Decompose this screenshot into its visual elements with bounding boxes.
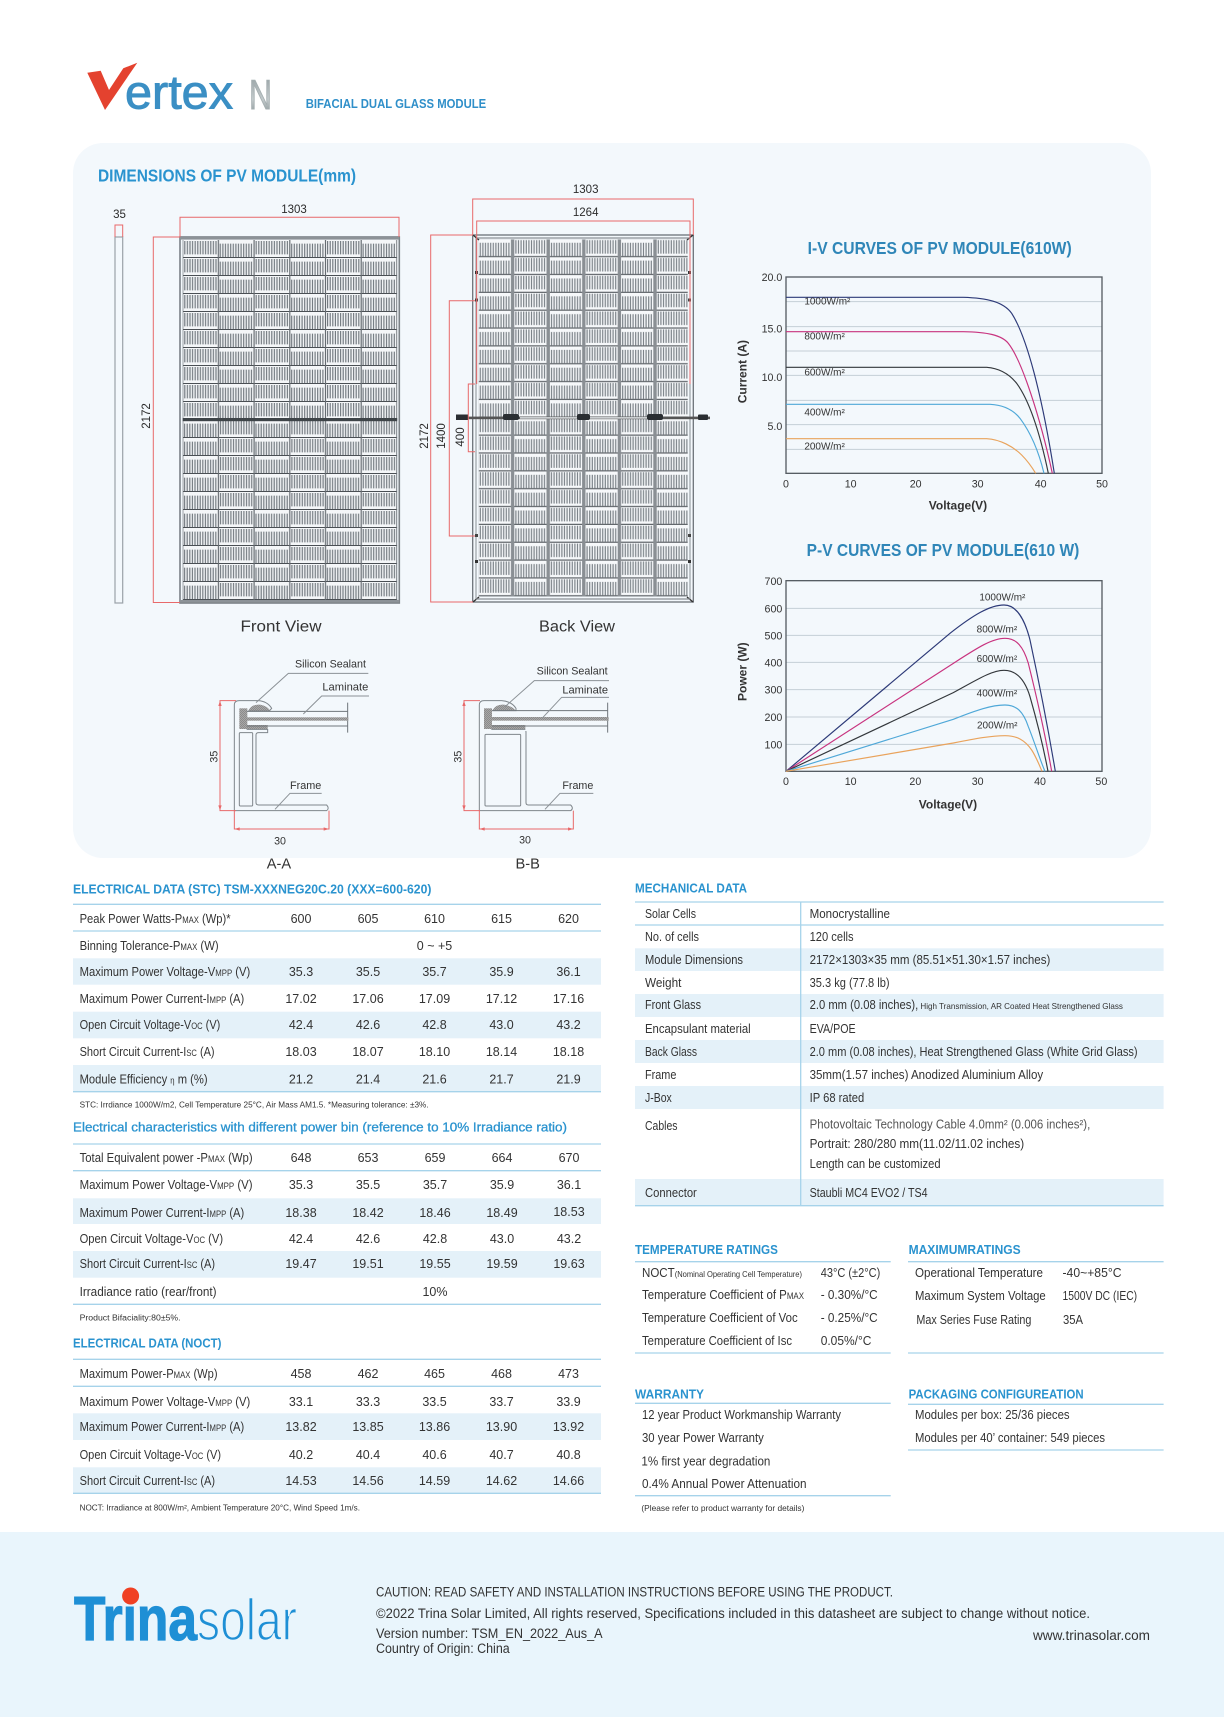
row: Isc: 18.07	[352, 1045, 384, 1059]
chart: I-V curves: 0	[783, 478, 789, 490]
footnote: STC: STC: Irrdiance 1000W/m2, Cell Temperature 25°C, Air Mass AM1.5. *Measuring tolerance: ±3%.	[80, 1100, 429, 1109]
row: Impp: 13.92	[553, 1420, 584, 1434]
text: caution and copyright: ©2022 Trina Solar Limited, All rights reserved, Specifications included in this datasheet are subject to change without notice.	[376, 1606, 1090, 1621]
row: coefficient of Voc: Temperature Coefficient of Voc	[642, 1310, 798, 1325]
row: Isc: 19.59	[486, 1257, 518, 1271]
row: solar cells	[645, 906, 890, 921]
row: encapsulant: EVA/POE	[810, 1021, 856, 1036]
row: system voltage: Maximum System Voltage	[915, 1288, 1046, 1303]
chart: P-V curves: 10	[845, 776, 857, 788]
row: binning tolerance: 0 ~ +5	[417, 939, 452, 953]
row: Impp: 17.09	[419, 992, 450, 1006]
row: total equivalent power: 670	[559, 1151, 579, 1165]
chart: I-V curves: 400W/m²	[804, 407, 846, 418]
dimension: back heights	[419, 235, 475, 602]
row: Isc: 19.51	[352, 1257, 384, 1271]
dimension: back widths	[473, 184, 693, 384]
chart: I-V curves: 10.0	[762, 372, 782, 384]
chart: I-V curves: 15.0	[762, 324, 782, 336]
row: Isc: 14.62	[486, 1474, 517, 1488]
row: Vmpp: 35.5	[356, 965, 380, 979]
row: Isc: 19.55	[419, 1257, 451, 1271]
drawing: cross section B-B: 35	[452, 751, 464, 763]
dimension: front width: 1303	[281, 204, 307, 216]
note: warranty details: (Please refer to product warranty for details)	[641, 1503, 805, 1513]
row: Isc: 18.03	[285, 1045, 317, 1059]
row: peak power: Peak Power Watts-PMAX (Wp)*	[80, 911, 231, 926]
drawing: cross section A-A: Silicon Sealant	[295, 659, 366, 671]
panel: dimensions and curves background	[73, 143, 1151, 858]
row: weight: Weight	[645, 975, 682, 990]
drawing: cross section A-A: 30	[274, 835, 286, 847]
row: max power: 465	[424, 1367, 445, 1381]
row: total equivalent power: 648	[291, 1151, 311, 1165]
row: efficiency: 21.9	[556, 1072, 581, 1086]
row: Isc: Short Circuit Current-ISC (A)	[80, 1044, 215, 1059]
row: max power: 473	[558, 1367, 579, 1381]
row: Impp: Maximum Power Current-IMPP (A)	[80, 1419, 244, 1434]
row: peak power: 620	[558, 912, 579, 926]
label: front view: Front View	[240, 619, 322, 636]
chart: I-V curves: 20	[910, 478, 922, 490]
row: Voc: 42.4	[289, 1232, 313, 1246]
row: Impp: 13.82	[285, 1420, 317, 1434]
row: connector: Connector	[645, 1185, 697, 1200]
chart: P-V curves: 300	[765, 685, 782, 697]
dimension: back heights: 2172	[419, 423, 431, 449]
row: max power: 458	[291, 1367, 311, 1381]
row: weight: 35.3 kg (77.8 lb)	[810, 975, 890, 990]
row: operational temperature	[915, 1265, 1122, 1280]
row: irradiance ratio: Irradiance ratio (rear/front)	[80, 1284, 217, 1299]
row: back glass: 2.0 mm (0.08 inches), Heat Strengthened Glass (White Grid Glass)	[810, 1044, 1138, 1059]
row: total equivalent power	[80, 1150, 579, 1165]
row: Isc: Short Circuit Current-ISC (A)	[80, 1473, 215, 1488]
row: number of cells: No. of cells	[645, 929, 699, 944]
row: Isc	[80, 1473, 584, 1488]
row: coefficient of Pmax: Temperature Coefficient of PMAX	[642, 1287, 804, 1302]
drawing: cross section A-A: 35	[208, 751, 220, 763]
logo: Vertex N: ertex	[125, 65, 233, 118]
chart: P-V curves: 30	[972, 776, 984, 788]
row: Impp: Maximum Power Current-IMPP (A)	[80, 1205, 244, 1220]
row: Vmpp: 35.9	[489, 965, 514, 979]
row: Isc: 19.47	[285, 1257, 317, 1271]
row: Voc: Open Circuit Voltage-VOC (V)	[80, 1447, 221, 1462]
row: peak power: 615	[491, 912, 512, 926]
chart: I-V curves: 20.0	[762, 272, 782, 284]
heading: maximum ratings: MAXIMUMRATINGS	[909, 1242, 1021, 1257]
chart: P-V curves: 0	[783, 776, 789, 788]
row: irradiance ratio	[80, 1284, 448, 1299]
dimension: back heights: 1400	[436, 423, 448, 449]
row: encapsulant: Encapsulant material	[645, 1021, 751, 1036]
drawing: cross section B-B	[452, 666, 609, 872]
row: Isc: 18.18	[553, 1045, 584, 1059]
heading: dimensions: DIMENSIONS OF PV MODULE(mm)	[98, 166, 356, 186]
row: Vmpp: 33.9	[556, 1395, 581, 1409]
row: peak power: 610	[424, 912, 445, 926]
row: system voltage: 1500V DC (IEC)	[1062, 1288, 1137, 1303]
row: number of cells	[645, 929, 854, 944]
dimension: front height	[141, 237, 180, 602]
row: Vmpp: Maximum Power Voltage-VMPP (V)	[80, 964, 250, 979]
chart: P-V curves: 50	[1095, 776, 1107, 788]
chart: I-V curves: 40	[1035, 478, 1047, 490]
row: front glass	[645, 997, 1123, 1012]
heading: temperature ratings: TEMPERATURE RATINGS	[635, 1242, 778, 1257]
row: Voc: 43.0	[489, 1018, 514, 1032]
chart: P-V curves: 600	[765, 603, 782, 615]
row: irradiance ratio: 10%	[422, 1285, 448, 1299]
row: Isc: 18.10	[419, 1045, 450, 1059]
row: peak power	[80, 911, 579, 926]
row: max power: Maximum Power-PMAX (Wp)	[80, 1366, 218, 1381]
product subtitle: BIFACIAL DUAL GLASS MODULE	[306, 97, 486, 111]
row: binning tolerance	[80, 938, 452, 953]
row: peak power: 600	[291, 912, 311, 926]
logo: Trina Solar: Trina	[74, 1585, 197, 1654]
row: efficiency: Module Efficiency η m (%)	[80, 1072, 208, 1086]
chart: I-V curves: 200W/m²	[804, 441, 846, 452]
row: Voc: 40.8	[556, 1448, 581, 1462]
row: Voc	[80, 1447, 581, 1462]
row: Voc: 42.6	[356, 1018, 380, 1032]
table: power bin characteristics	[73, 1144, 601, 1304]
chart: I-V curves: 1000W/m²	[804, 297, 851, 308]
drawing: cross section B-B: 30	[519, 835, 531, 847]
row: Voc: 43.0	[490, 1232, 514, 1246]
row: Voc: 43.2	[556, 1018, 581, 1032]
text: caution and copyright: Country of Origin: China	[376, 1641, 510, 1656]
heading: power bin characteristics: Electrical characteristics with different power bin (reference to 10% Irradiance ratio)	[73, 1120, 567, 1135]
drawing: cross section A-A: Laminate	[322, 682, 368, 694]
row: Impp: 18.53	[553, 1205, 585, 1219]
row: connector	[645, 1185, 928, 1200]
row: solar cells: Monocrystalline	[810, 906, 890, 921]
row: Voc: 42.4	[289, 1018, 313, 1032]
row: total equivalent power: 664	[492, 1151, 512, 1165]
row: coefficient of Isc: 0.05%/°C	[821, 1333, 871, 1348]
row: Isc: 14.66	[553, 1474, 584, 1488]
list: warranty: 1% first year degradation	[641, 1454, 770, 1468]
table: electrical data NOCT	[73, 1359, 601, 1493]
row: Vmpp: 35.7	[422, 965, 447, 979]
list: warranty: 0.4% Annual Power Attenuation	[642, 1476, 807, 1491]
chart: P-V curves: P-V CURVES OF PV MODULE(610 W)	[807, 540, 1079, 560]
chart: P-V curves: Power (W)	[736, 642, 750, 701]
row: Voc: 43.2	[557, 1232, 581, 1246]
chart: I-V curves: 10	[845, 478, 857, 490]
row: j-box	[645, 1090, 864, 1105]
row: front glass: High Transmission, AR Coated Heat Strengthened Glass	[920, 1001, 1123, 1011]
row: Voc: 42.6	[356, 1232, 380, 1246]
dimension: back heights: 400	[455, 427, 467, 447]
chart: P-V curves: 400W/m²	[977, 689, 1018, 700]
row: Impp: 13.90	[486, 1420, 517, 1434]
row: cables: Cables	[645, 1118, 678, 1133]
row: Vmpp: 33.3	[356, 1395, 380, 1409]
row: cables: Portrait: 280/280 mm(11.02/11.02 inches)	[810, 1136, 1024, 1151]
row: weight	[645, 975, 890, 990]
heading: electrical data STC: ELECTRICAL DATA (STC) TSM-XXXNEG20C.20 (XXX=600-620)	[73, 881, 431, 896]
row: NOCT: 43°C (±2°C)	[821, 1265, 880, 1280]
row: front glass: 2.0 mm (0.08 inches),	[810, 997, 918, 1012]
chart: I-V curves: Current (A)	[736, 340, 750, 403]
footnote: bifaciality: Product Bifaciality:80±5%.	[80, 1314, 181, 1322]
row: Isc: 19.63	[553, 1257, 585, 1271]
drawing: cross section A-A: Frame	[290, 780, 321, 792]
row: Voc: 42.8	[423, 1232, 447, 1246]
row: module dimensions	[645, 952, 1050, 967]
row: Vmpp: 35.7	[423, 1178, 447, 1192]
row: cables: Length can be customized	[810, 1156, 941, 1171]
row: fuse rating: Max Series Fuse Rating	[916, 1312, 1031, 1327]
drawing: cross section A-A	[208, 659, 369, 872]
heading: electrical data NOCT: ELECTRICAL DATA (NOCT)	[73, 1335, 221, 1350]
dimension: front height: 2172	[141, 403, 153, 429]
logo: Trina Solar	[74, 1585, 297, 1654]
row: Impp	[80, 991, 584, 1006]
row: Impp: 18.38	[285, 1206, 317, 1220]
chart: I-V curves: 600W/m²	[804, 368, 846, 379]
row: Voc	[80, 1017, 581, 1032]
row: Vmpp	[80, 964, 581, 979]
chart: I-V curves: 800W/m²	[804, 332, 846, 343]
row: Impp: 18.46	[419, 1206, 451, 1220]
chart: P-V curves: 200W/m²	[977, 720, 1018, 731]
row: coefficient of Pmax: - 0.30%/°C	[821, 1287, 878, 1302]
dimension: front width	[180, 204, 399, 237]
heading: warranty: WARRANTY	[635, 1386, 704, 1401]
row: Isc: 14.56	[352, 1474, 384, 1488]
drawing: side profile: 35	[113, 209, 126, 221]
row: Voc: 42.8	[422, 1018, 447, 1032]
row: Vmpp: Maximum Power Voltage-VMPP (V)	[80, 1177, 253, 1192]
row: connector: Staubli MC4 EVO2 / TS4	[810, 1185, 928, 1200]
text: caution and copyright: Version number: TSM_EN_2022_Aus_A	[376, 1626, 603, 1641]
row: encapsulant	[645, 1021, 856, 1036]
row: Isc: 14.59	[419, 1474, 450, 1488]
row: solar cells: Solar Cells	[645, 906, 696, 921]
chart: P-V curves: 20	[909, 776, 921, 788]
list: warranty: 12 year Product Workmanship Warranty	[642, 1407, 841, 1422]
chart: P-V curves: 400	[765, 658, 782, 670]
row: Isc	[80, 1256, 585, 1271]
row: Isc: 14.53	[285, 1474, 317, 1488]
row: Vmpp: 35.5	[356, 1178, 380, 1192]
row: module dimensions: 2172×1303×35 mm (85.51×51.30×1.57 inches)	[810, 952, 1050, 967]
drawing: back view module	[473, 235, 693, 602]
row: Impp: 17.02	[285, 992, 317, 1006]
chart: I-V curves: 5.0	[768, 421, 782, 433]
icon: junction box connectors and cable	[456, 414, 710, 420]
row: Voc: 40.4	[356, 1448, 380, 1462]
row: Impp: 17.12	[486, 992, 517, 1006]
text: caution and copyright	[376, 1585, 1090, 1656]
chart: P-V curves	[736, 540, 1107, 811]
row: Impp: 17.06	[352, 992, 384, 1006]
chart: I-V curves: 30	[972, 478, 984, 490]
row: Vmpp: 35.9	[490, 1178, 514, 1192]
drawing: cross section B-B: Silicon Sealant	[537, 666, 608, 678]
drawing: cross section B-B: Laminate	[562, 684, 608, 696]
row: Vmpp: 36.1	[557, 1178, 581, 1192]
row: Vmpp: 33.5	[422, 1395, 447, 1409]
row: fuse rating: 35A	[1063, 1312, 1083, 1327]
chart: P-V curves: 800W/m²	[977, 624, 1018, 635]
row: total equivalent power: Total Equivalent power -PMAX (Wp)	[80, 1150, 253, 1165]
dimension: back widths: 1303	[573, 184, 598, 196]
row: peak power: 605	[358, 912, 378, 926]
chart: P-V curves: 500	[765, 630, 782, 642]
table: mechanical data	[635, 902, 1164, 1206]
row: number of cells: 120 cells	[810, 929, 854, 944]
row: back glass	[645, 1044, 1138, 1059]
chart: P-V curves: 1000W/m²	[979, 593, 1026, 604]
row: NOCT: NOCT(Nominal Operating Cell Temperature)	[642, 1265, 802, 1280]
row: front glass: Front Glass	[645, 997, 701, 1012]
row: back glass: Back Glass	[645, 1044, 697, 1059]
dimension: back widths: 1264	[573, 207, 599, 219]
row: cables	[645, 1118, 1090, 1171]
row: max power: 468	[491, 1367, 512, 1381]
row: efficiency: 21.6	[422, 1072, 447, 1086]
chart: I-V curves: 50	[1096, 478, 1108, 490]
row: Voc	[80, 1231, 581, 1246]
row: coefficient of Pmax	[642, 1287, 878, 1302]
table: electrical data STC	[73, 904, 601, 1092]
list: warranty: 30 year Power Warranty	[642, 1430, 764, 1445]
list: packaging: Modules per box: 25/36 pieces	[915, 1407, 1070, 1422]
row: Impp: Maximum Power Current-IMPP (A)	[80, 991, 244, 1006]
chart: P-V curves: 700	[765, 576, 782, 588]
row: Voc: Open Circuit Voltage-VOC (V)	[80, 1017, 220, 1032]
row: efficiency: 21.7	[489, 1072, 514, 1086]
row: Impp: 13.86	[419, 1420, 450, 1434]
row: efficiency: 21.2	[289, 1072, 313, 1086]
table: maximum ratings	[908, 1262, 1164, 1353]
row: binning tolerance: Binning Tolerance-PMAX (W)	[80, 938, 219, 953]
chart: P-V curves: Voltage(V)	[919, 797, 977, 811]
row: coefficient of Voc: - 0.25%/°C	[821, 1310, 878, 1325]
row: max power: 462	[358, 1367, 378, 1381]
row: frame: 35mm(1.57 inches) Anodized Aluminium Alloy	[810, 1067, 1044, 1082]
footnote: NOCT: NOCT: Irradiance at 800W/m², Ambient Temperature 20°C, Wind Speed 1m/s.	[80, 1504, 360, 1513]
table: temperature ratings	[635, 1262, 891, 1353]
row: Isc	[80, 1044, 584, 1059]
logo: Trina Solar: solar	[197, 1588, 297, 1653]
row: frame	[645, 1067, 1044, 1082]
row: Impp: 18.42	[352, 1206, 384, 1220]
row: Vmpp: Maximum Power Voltage-VMPP (V)	[80, 1394, 250, 1409]
chart: P-V curves: 100	[765, 739, 782, 751]
row: j-box: IP 68 rated	[810, 1090, 864, 1105]
row: system voltage	[915, 1288, 1137, 1303]
drawing: cross section B-B: B-B	[515, 856, 540, 872]
row: total equivalent power: 653	[358, 1151, 378, 1165]
row: j-box: J-Box	[645, 1090, 672, 1105]
chart: I-V curves	[736, 238, 1108, 512]
drawing: cross section B-B: Frame	[562, 780, 593, 792]
row: Impp: 18.49	[486, 1206, 518, 1220]
row: frame: Frame	[645, 1067, 676, 1082]
row: Isc: Short Circuit Current-ISC (A)	[80, 1256, 215, 1271]
heading: mechanical data: MECHANICAL DATA	[635, 881, 748, 896]
row: Voc: Open Circuit Voltage-VOC (V)	[80, 1231, 223, 1246]
row: coefficient of Isc: Temperature Coefficient of Isc	[642, 1333, 792, 1348]
label: back view: Back View	[539, 619, 616, 636]
row: Voc: 40.6	[422, 1448, 447, 1462]
row: Voc: 40.2	[289, 1448, 313, 1462]
row: Vmpp: 35.3	[289, 1178, 313, 1192]
list: warranty	[635, 1403, 891, 1496]
row: operational temperature: Operational Temperature	[915, 1265, 1043, 1280]
chart: P-V curves: 200	[765, 712, 782, 724]
row: cables: Photovoltaic Technology Cable 4.0mm² (0.006 inches²),	[810, 1118, 1090, 1132]
drawing: front view module	[180, 237, 399, 603]
logo: Vertex N	[87, 63, 272, 118]
row: Impp: 17.16	[553, 992, 584, 1006]
panel: footer background	[0, 1532, 1224, 1717]
row: efficiency: 21.4	[356, 1072, 380, 1086]
row: total equivalent power: 659	[425, 1151, 445, 1165]
row: Vmpp	[80, 1394, 581, 1409]
list: packaging: Modules per 40’ container: 549 pieces	[915, 1430, 1105, 1445]
row: Vmpp: 35.3	[289, 965, 313, 979]
row: max power	[80, 1366, 579, 1381]
row: Impp	[80, 1205, 585, 1220]
row: operational temperature: -40~+85°C	[1062, 1265, 1122, 1280]
row: Impp: 13.85	[352, 1420, 384, 1434]
text: caution and copyright: CAUTION: READ SAFETY AND INSTALLATION INSTRUCTIONS BEFORE USING THE PRODUCT.	[376, 1585, 893, 1600]
chart: P-V curves: 40	[1034, 776, 1046, 788]
row: Vmpp: 33.7	[489, 1395, 514, 1409]
row: Voc: 40.7	[489, 1448, 514, 1462]
list: packaging	[908, 1404, 1164, 1450]
chart: I-V curves: I-V CURVES OF PV MODULE(610W)	[808, 238, 1072, 258]
row: Impp	[80, 1419, 584, 1434]
row: Vmpp: 36.1	[556, 965, 581, 979]
row: Vmpp	[80, 1177, 581, 1192]
row: Isc: 18.14	[486, 1045, 517, 1059]
chart: I-V curves: Voltage(V)	[929, 498, 987, 512]
row: Vmpp: 33.1	[289, 1395, 313, 1409]
heading: packaging configuration: PACKAGING CONFIGUREATION	[909, 1386, 1084, 1401]
text: website: www.trinasolar.com	[1032, 1628, 1150, 1643]
drawing: cross section A-A: A-A	[267, 856, 291, 872]
logo: Vertex N: N	[249, 71, 272, 118]
drawing: side profile	[113, 209, 126, 603]
chart: P-V curves: 600W/m²	[977, 654, 1018, 665]
row: module dimensions: Module Dimensions	[645, 952, 743, 967]
row: efficiency	[80, 1072, 581, 1086]
